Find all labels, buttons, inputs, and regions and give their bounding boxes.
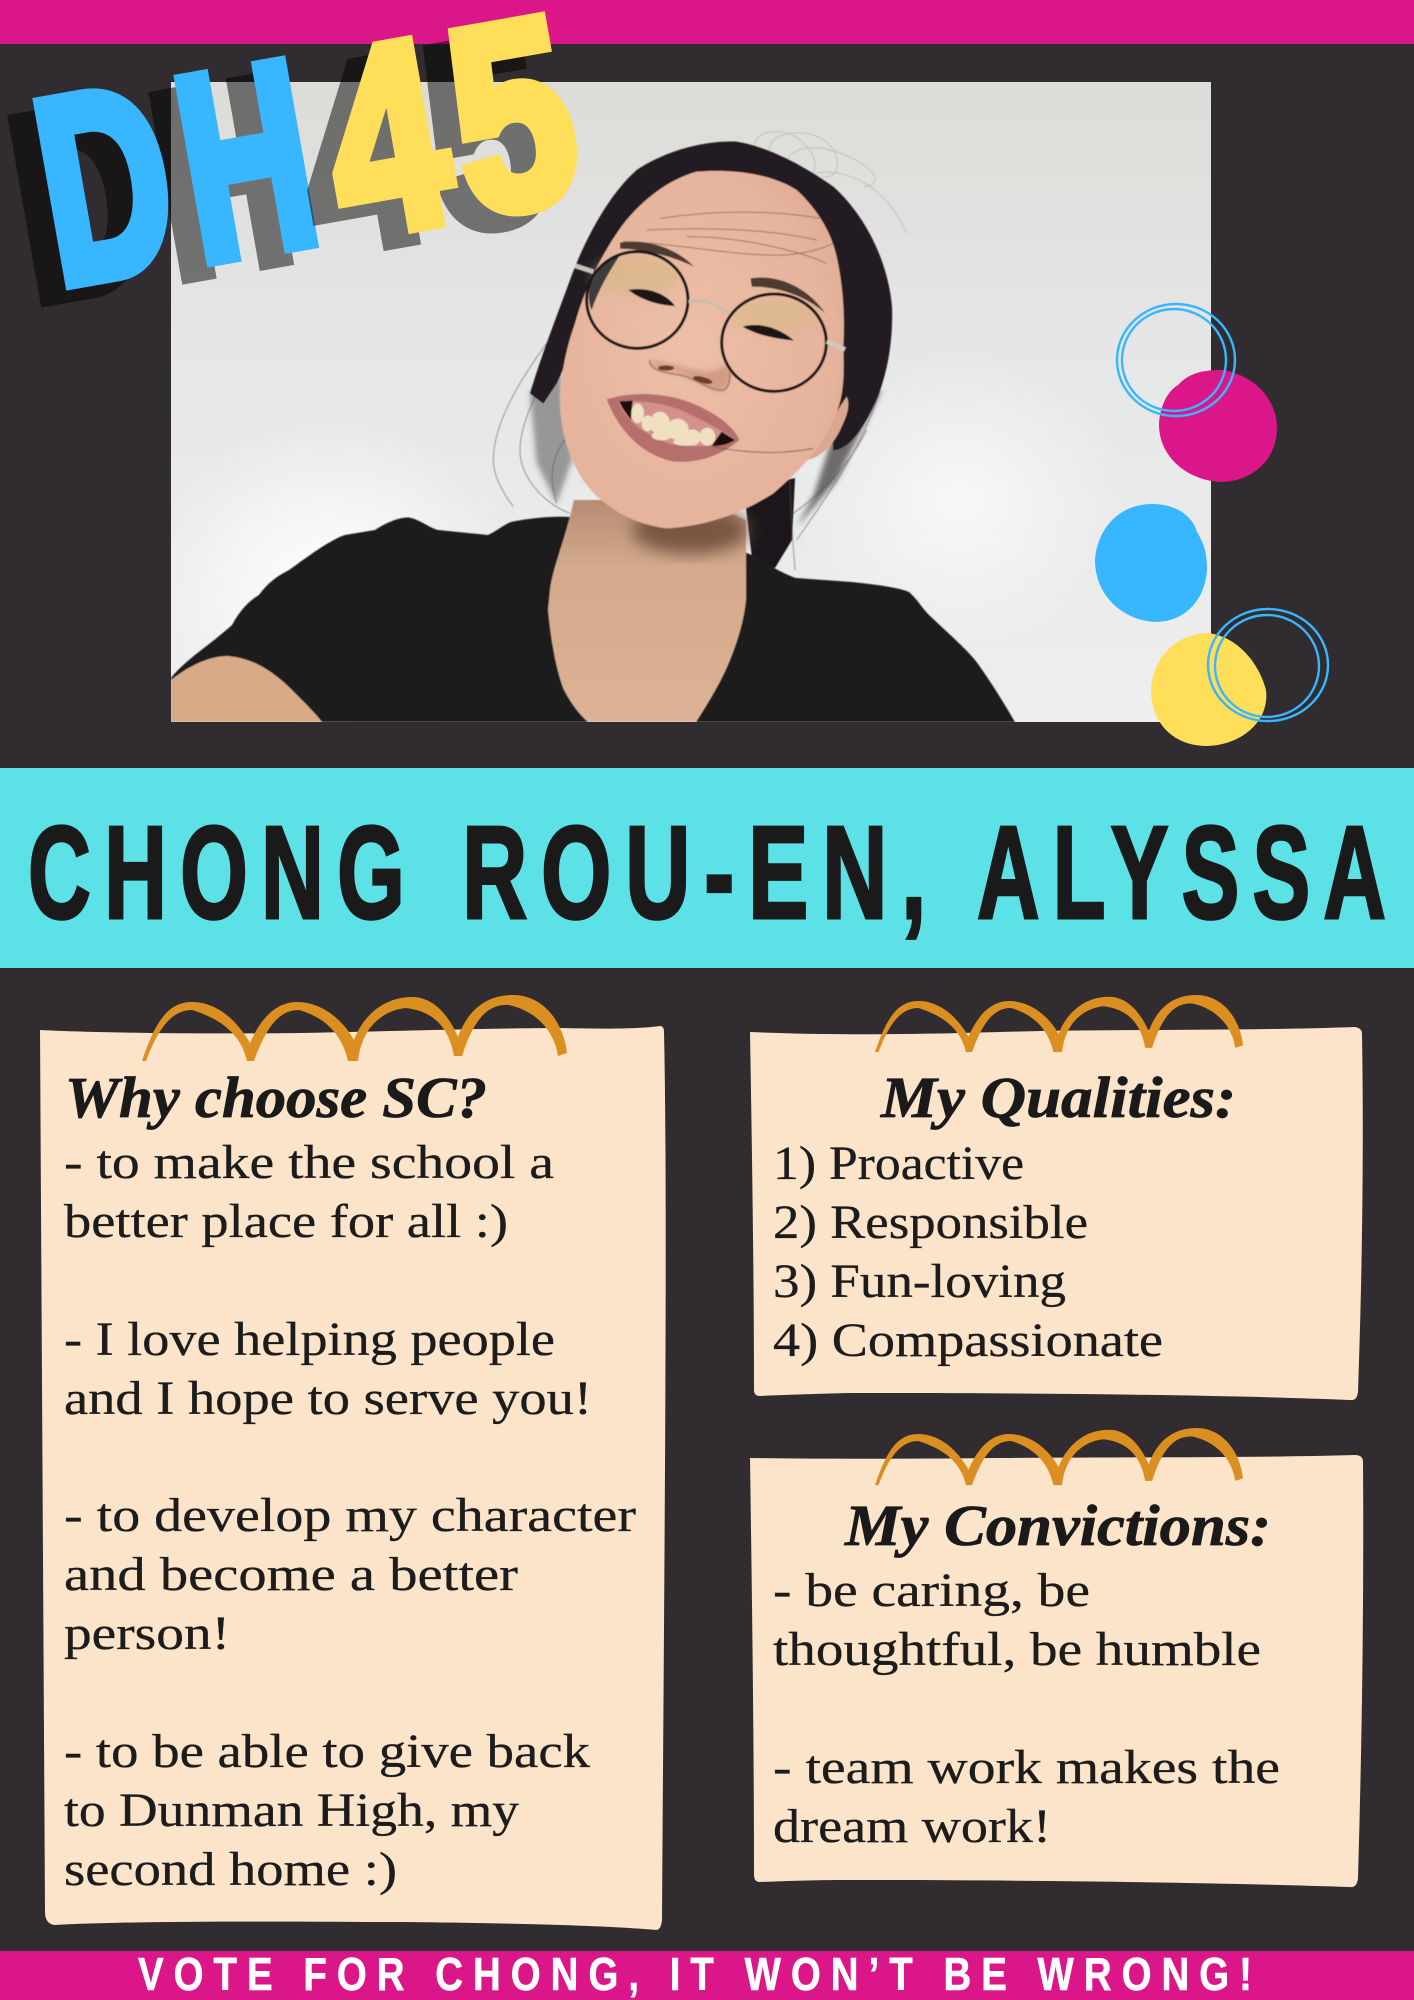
binder arcs — [142, 995, 567, 1061]
list: 1) Proactive — [773, 1137, 1024, 1190]
top magenta bar — [0, 0, 1414, 44]
heading: My Convictions: — [844, 1493, 1271, 1558]
footer bar — [0, 1948, 1414, 2000]
panel: my qualities — [750, 995, 1363, 1400]
body text: and I hope to serve you! — [64, 1372, 592, 1425]
body text — [773, 1564, 1280, 1853]
glasses — [575, 252, 845, 391]
forehead hair lines — [623, 212, 833, 263]
photo: smiling portrait — [140, 82, 1211, 760]
wispy hair left — [530, 363, 573, 503]
DH shadow: H — [132, 21, 310, 334]
body text: dream work! — [773, 1800, 1051, 1853]
DH letters: D — [16, 27, 194, 340]
45 shadow: 4 — [279, 0, 445, 310]
eyes — [628, 289, 675, 306]
body text: and become a better — [64, 1548, 518, 1601]
body text: - to be able to give back — [64, 1725, 590, 1778]
list: 4) Compassionate — [773, 1314, 1163, 1367]
heading: My Qualities: — [880, 1065, 1236, 1130]
body text: - team work makes the — [773, 1741, 1280, 1794]
flyaway hair — [755, 131, 907, 233]
list: 3) Fun-loving — [773, 1255, 1066, 1308]
nose — [650, 360, 730, 392]
arm — [171, 656, 322, 722]
name: ROU-EN, — [462, 799, 940, 946]
binder arcs — [875, 995, 1243, 1052]
loose strands — [493, 343, 880, 570]
binder arcs — [875, 1428, 1243, 1485]
45 letters — [304, 0, 596, 293]
body text: - to make the school a — [64, 1136, 554, 1189]
lens tint left — [594, 257, 681, 297]
name — [28, 799, 1399, 946]
list — [773, 1137, 1163, 1367]
body text: person! — [64, 1607, 230, 1660]
outlined circle upper — [1117, 304, 1235, 416]
45 shadow — [279, 0, 571, 310]
teeth — [631, 403, 715, 446]
stray hair across cheek — [713, 447, 813, 453]
body text: better place for all :) — [64, 1195, 508, 1248]
neck — [548, 500, 746, 722]
wispy hair right — [797, 390, 882, 527]
name: CHONG — [28, 799, 418, 946]
hair — [530, 141, 892, 450]
yellow blob — [1151, 633, 1266, 746]
list: 2) Responsible — [773, 1196, 1088, 1249]
shirt — [171, 517, 1015, 722]
body text: - be caring, be — [773, 1564, 1090, 1617]
body text — [64, 1136, 636, 1896]
panel: my convictions — [750, 1428, 1363, 1887]
body text: thoughtful, be humble — [773, 1623, 1261, 1676]
heading: Why choose SC? — [65, 1065, 487, 1130]
DH letters: H — [157, 4, 335, 317]
name banner — [0, 768, 1414, 968]
body text: - I love helping people — [64, 1313, 555, 1366]
lens tint right — [731, 299, 817, 334]
body text: to Dunman High, my — [64, 1784, 519, 1837]
DH45 logo — [0, 0, 596, 357]
hair bun — [745, 478, 795, 568]
blue blob — [1095, 504, 1207, 622]
body text: second home :) — [64, 1843, 397, 1896]
magenta blob — [1159, 370, 1277, 482]
eyebrows — [620, 242, 694, 267]
panel: why choose SC — [40, 995, 666, 1930]
body text: - to develop my character — [64, 1489, 636, 1542]
ear — [802, 397, 848, 460]
lens reflection — [589, 256, 619, 310]
face — [560, 171, 844, 528]
decorative blobs — [1095, 304, 1328, 746]
outlined circle lower — [1208, 609, 1328, 721]
mouth — [607, 394, 739, 462]
